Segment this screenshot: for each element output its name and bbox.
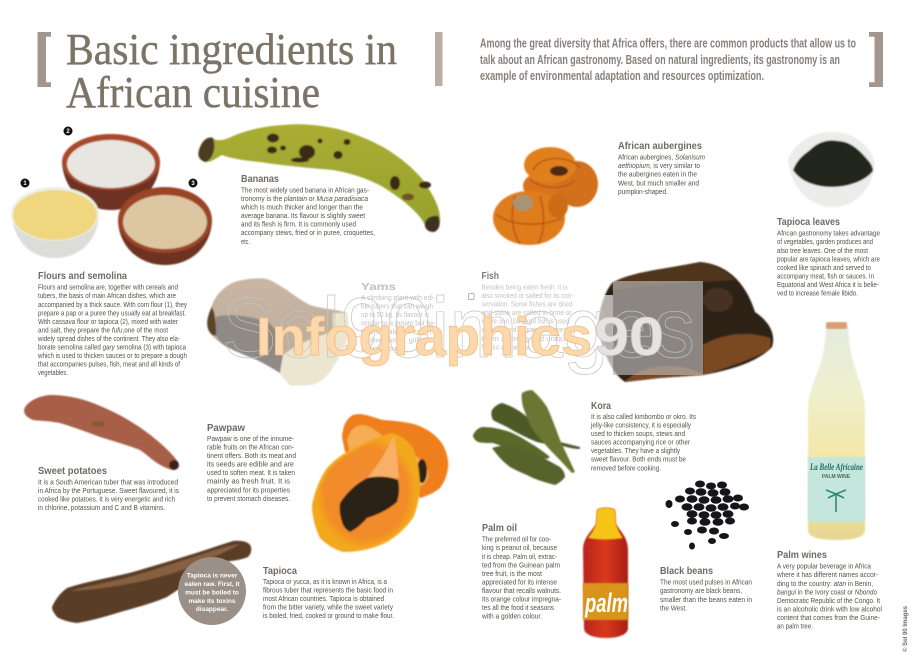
right bracket (869, 32, 883, 87)
text: Flours and semolina: accompanied by a thick sauce. With corn flour (1), they (38, 302, 187, 309)
watermark: Infographics90: 90 (594, 307, 664, 367)
watermark: outlined Sol90images: Sol90images (222, 281, 695, 376)
text: Palm wines: Democratic Republic of the Congo. It (777, 598, 880, 605)
text: African aubergines: aethiopium, is very similar to (618, 163, 700, 170)
icon: small square marker (468, 294, 474, 300)
text: Fish: servation. Some fishes are dried (482, 302, 573, 309)
text: Fish: in stews and sauces and gives (482, 327, 567, 334)
text: Yams: up to 50 kg. Its flavour is (361, 312, 429, 319)
text: Pawpaw (207, 422, 296, 503)
text: Black beans: the West. (660, 605, 687, 612)
image: palm wine bottle (808, 322, 865, 540)
text: Palm oil: with a golden colour. (481, 614, 542, 621)
text: Tapioca: Tapioca or yucca, as it is known in Africa, is a (263, 579, 387, 586)
text: Bananas: average banana. Its flavour is slightly sweet (241, 213, 365, 220)
text: Flours and semolina: With cassava flour or tapioca (2), mixed with water (38, 319, 179, 326)
text: Flours and semolina: widely spread dishes of the continent. They also ela- (37, 336, 181, 343)
image: sweet potato (24, 395, 179, 470)
image: banana (198, 124, 440, 232)
text: Black beans: gastronomy are black beans, (660, 588, 742, 595)
text: Tapioca leaves: ved to increase female libido. (777, 290, 858, 298)
image: bowl of tapioca leaves (788, 132, 875, 207)
number marker 3: 3 (191, 181, 195, 187)
text: Black beans (660, 565, 752, 612)
text: Bananas: etc. (241, 239, 250, 246)
text: Bananas: accompany stews, fried or in puree, croquettes, (241, 230, 375, 237)
text: Fish: Besides being eaten fresh, it is (482, 284, 568, 292)
image: yam (207, 278, 349, 386)
text: Yams: in puree. (361, 346, 403, 353)
text: Yams: A climbing plant with edi- (361, 295, 436, 302)
title: Basic ingredients in (66, 25, 397, 74)
text: Fish: in the sun. Smoked fish is used (482, 319, 570, 326)
text: Palm wines: bangui in the Ivory coast or Nbondo (777, 589, 877, 596)
text: Yams: similar to a potato but be- (361, 321, 437, 328)
image: tapioca root (52, 541, 251, 623)
text: Flours and semolina: borate semolina called gary semolina (3) with tapioca (38, 344, 186, 352)
text: Sweet potatoes: in Africa by the Portuguese. Sweet flavoured, it is (38, 488, 179, 495)
text: Fish: them a strong and unique (482, 336, 570, 343)
text: African aubergines: pumpkin-shaped. (618, 189, 668, 196)
text: Palm oil: tree fruit, is the most (482, 571, 542, 578)
text: Fish: also smoked or salted for its con- (482, 293, 574, 300)
credit: © Sol 90 Images (902, 605, 909, 652)
callout: tapioca warning (178, 557, 246, 625)
callout: tapioca warning: disappear. (196, 606, 228, 613)
image: palm oil bottle: palm (584, 588, 628, 618)
title: African cuisine (66, 68, 320, 117)
panel: grey overlay on fish (613, 281, 703, 375)
text: African aubergines: West, but much smaller and (618, 180, 699, 187)
text: Fish: flavour and aroma. (482, 344, 532, 351)
text: Flours and semolina: which is used to thicken sauces or to prepare a dough (37, 353, 187, 360)
image: black beans (666, 480, 749, 550)
intro text: example of environmental adaptation and resources optimization. (480, 69, 764, 83)
text: Flours and semolina (37, 270, 187, 377)
text: Black beans: The most used pulses in African (660, 580, 752, 587)
text: Flours and semolina: Flours and semolina (38, 270, 127, 282)
image: palm wine bottle: La Belle Africaine (809, 462, 863, 472)
text: Kora: Kora (591, 400, 611, 412)
text: Flours and semolina: prepare a pap or a puree they usually eat at breakfast. (38, 310, 186, 317)
text: Flours and semolina: vegetables. (38, 370, 68, 377)
text: Kora: sweet flavour. Both ends must be (591, 457, 686, 464)
callout: tapioca warning: Tapioca is never (187, 572, 238, 580)
image: palm wine bottle: PALM WINE (822, 474, 851, 480)
middle divider bar (435, 32, 442, 86)
text: Palm wines (776, 549, 882, 630)
text: Palm wines: content that comes from the Guine- (777, 615, 881, 622)
text: Fish: Fish (482, 270, 499, 282)
text: Pawpaw: Pawpaw is one of the innume- (207, 436, 295, 443)
image: papaya (312, 414, 448, 552)
text: Palm oil: tes all the food it seasons (482, 605, 554, 612)
watermark: Infographics90: Infographics (256, 307, 592, 367)
left bracket (38, 32, 51, 87)
callout: tapioca warning: must be boiled to (185, 590, 239, 596)
text: Palm oil: Palm oil (482, 522, 517, 534)
image: smoked fish (598, 262, 773, 382)
callout: tapioca warning: make its toxins (189, 598, 236, 605)
callout: tapioca warning: eaten raw. First, it (184, 581, 240, 588)
text: Kora (590, 400, 696, 472)
text: Yams: ble tubers that can weigh (361, 304, 433, 310)
text: Black beans: Black beans (660, 565, 713, 577)
text: Palm wines: ding to the country: atan in Benin, (777, 581, 873, 588)
text: Flours and semolina: Flours and semolina are, together with cereals and (38, 285, 178, 292)
text: Tapioca: most African countries. Tapioca is obtained (263, 596, 384, 603)
text: Kora: jelly-like consistency, it is especially (590, 422, 691, 430)
text: Yams: cooked, boiled, grilled or (361, 338, 436, 345)
text: Pawpaw: mainly as fresh fruit. It is (207, 479, 291, 486)
text: Pawpaw: rable fruits on the African con- (207, 444, 295, 452)
title (66, 25, 397, 117)
text: Bananas: which is much thicker and longer than the (240, 204, 363, 212)
text: Kora: sauces accompanying rice or other (591, 440, 691, 447)
text: Tapioca leaves: African gastronomy takes advantage (777, 231, 880, 238)
text: Sweet potatoes (38, 465, 179, 512)
text: Palm wines: where it has different names accor- (776, 572, 879, 579)
text: Palm oil: appreciated for its intense (482, 579, 557, 586)
text: African aubergines: African aubergines (618, 140, 702, 152)
text: Flours and semolina: tubers, the basis of main African dishes, which are (38, 293, 176, 300)
text: Kora: vegetables. They have a slightly (591, 448, 680, 455)
text: Black beans: smaller than the beans eaten in (660, 597, 752, 604)
text: Tapioca: Tapioca (263, 565, 297, 577)
text: Palm oil: king is peanut oil, because (482, 545, 557, 552)
text: Yams: Yams (361, 281, 396, 293)
text: Palm oil: ted from the Guinean palm (482, 562, 560, 569)
text: Tapioca leaves: accompany meat, fish or sauces. In (777, 273, 874, 280)
text: Fish (482, 270, 574, 351)
text: Palm wines: Palm wines (777, 549, 827, 561)
text: Tapioca leaves: popular are tapioca leaves, which are (777, 256, 880, 263)
text: Flours and semolina: that accompanies pulses, fish, meat and all kinds of (38, 362, 180, 369)
text: Palm oil: Its orange colour impregna- (482, 596, 562, 604)
text: Palm oil: The preferred oil for coo- (482, 537, 552, 544)
text: African aubergines: African aubergines, Solanisum (618, 155, 705, 162)
text: Yams (361, 281, 437, 353)
text: Tapioca: fibrous tuber that represents the basic food in (263, 588, 393, 594)
text: Bananas: tronomy is the plantain or Musa paradisiaca (241, 196, 368, 203)
text: Palm wines: A very popular beverage in Africa (777, 564, 871, 571)
text: African aubergines (618, 140, 705, 196)
text: Sweet potatoes: in chlorine, potassium and C and B vitamins. (38, 505, 165, 512)
image: kora (okra) (473, 390, 580, 485)
text: Bananas: Bananas (241, 173, 279, 185)
text: Bananas (240, 173, 375, 246)
image: African aubergines (493, 147, 598, 245)
number marker 1 (20, 178, 30, 188)
text: Palm oil (481, 522, 562, 621)
text: Tapioca (263, 565, 394, 620)
image: bowls of flour and semolina (11, 134, 212, 265)
image: palm oil bottle (583, 508, 628, 638)
text: Sweet potatoes: cooked like potatoes. It is very energetic and rich (38, 497, 175, 504)
text: Pawpaw: its seeds are edible and are (207, 462, 294, 469)
text: Tapioca leaves (777, 216, 880, 298)
text: Tapioca leaves: Equatorial and West Africa it is belie- (777, 282, 880, 289)
text: Flours and semolina: and salt, they prepare the fufu,one of the most (38, 327, 168, 334)
text: Bananas: The most widely used banana in African gas- (241, 188, 370, 194)
text: Kora: used to thicken soups, stews and (591, 431, 685, 438)
text: Palm wines: is an alcoholic drink with low alcohol (777, 606, 882, 613)
text: Pawpaw: to prevent stomach diseases. (207, 496, 290, 503)
text: Tapioca: from the bitter variety, while the sweet variety (263, 605, 393, 612)
text: Palm oil: it is cheap. Palm oil, extrac- (482, 554, 558, 561)
text: Fish: and some are salted in brine or (482, 310, 572, 317)
text: Pawpaw: tinent offers. Both its meat and (207, 453, 296, 460)
faded left edge of fish (596, 295, 613, 385)
text: Kora: removed before cooking. (591, 465, 661, 472)
intro text (480, 36, 856, 83)
text: Kora: It is also called kimbombo or okro. Its (591, 414, 696, 421)
text: Sweet potatoes: Sweet potatoes (38, 465, 107, 477)
text: African aubergines: the aubergines eaten in the (618, 172, 697, 179)
text: Palm wines: an palm tree. (777, 624, 813, 630)
text: Palm oil: flavour that recalls walnuts. (482, 588, 561, 595)
number marker 2: 2 (66, 129, 70, 135)
text: Sweet potatoes: It is a South American tuber that was introduced (38, 480, 178, 486)
text: Bananas: and its flesh is firm. It is commonly used (241, 222, 356, 228)
text: Pawpaw: Pawpaw (207, 422, 246, 434)
text: Pawpaw: appreciated for its properties (207, 487, 290, 494)
text: Tapioca: is boiled, fried, cooked or ground to make flour. (263, 613, 394, 620)
text: Tapioca leaves: cooked like spinach and served to (777, 265, 871, 272)
number marker 2 (64, 126, 72, 136)
number marker 1: 1 (23, 181, 27, 187)
number marker 3 (188, 178, 198, 188)
text: Pawpaw: used to soften meat. It is taken (207, 470, 295, 477)
text: Tapioca leaves: Tapioca leaves (777, 216, 840, 228)
text: Yams: tter. It is always eaten (361, 329, 431, 336)
text: Tapioca leaves: of vegetables, garden produces and (777, 239, 873, 246)
text: Tapioca leaves: also tree leaves. One of the most (777, 248, 868, 255)
